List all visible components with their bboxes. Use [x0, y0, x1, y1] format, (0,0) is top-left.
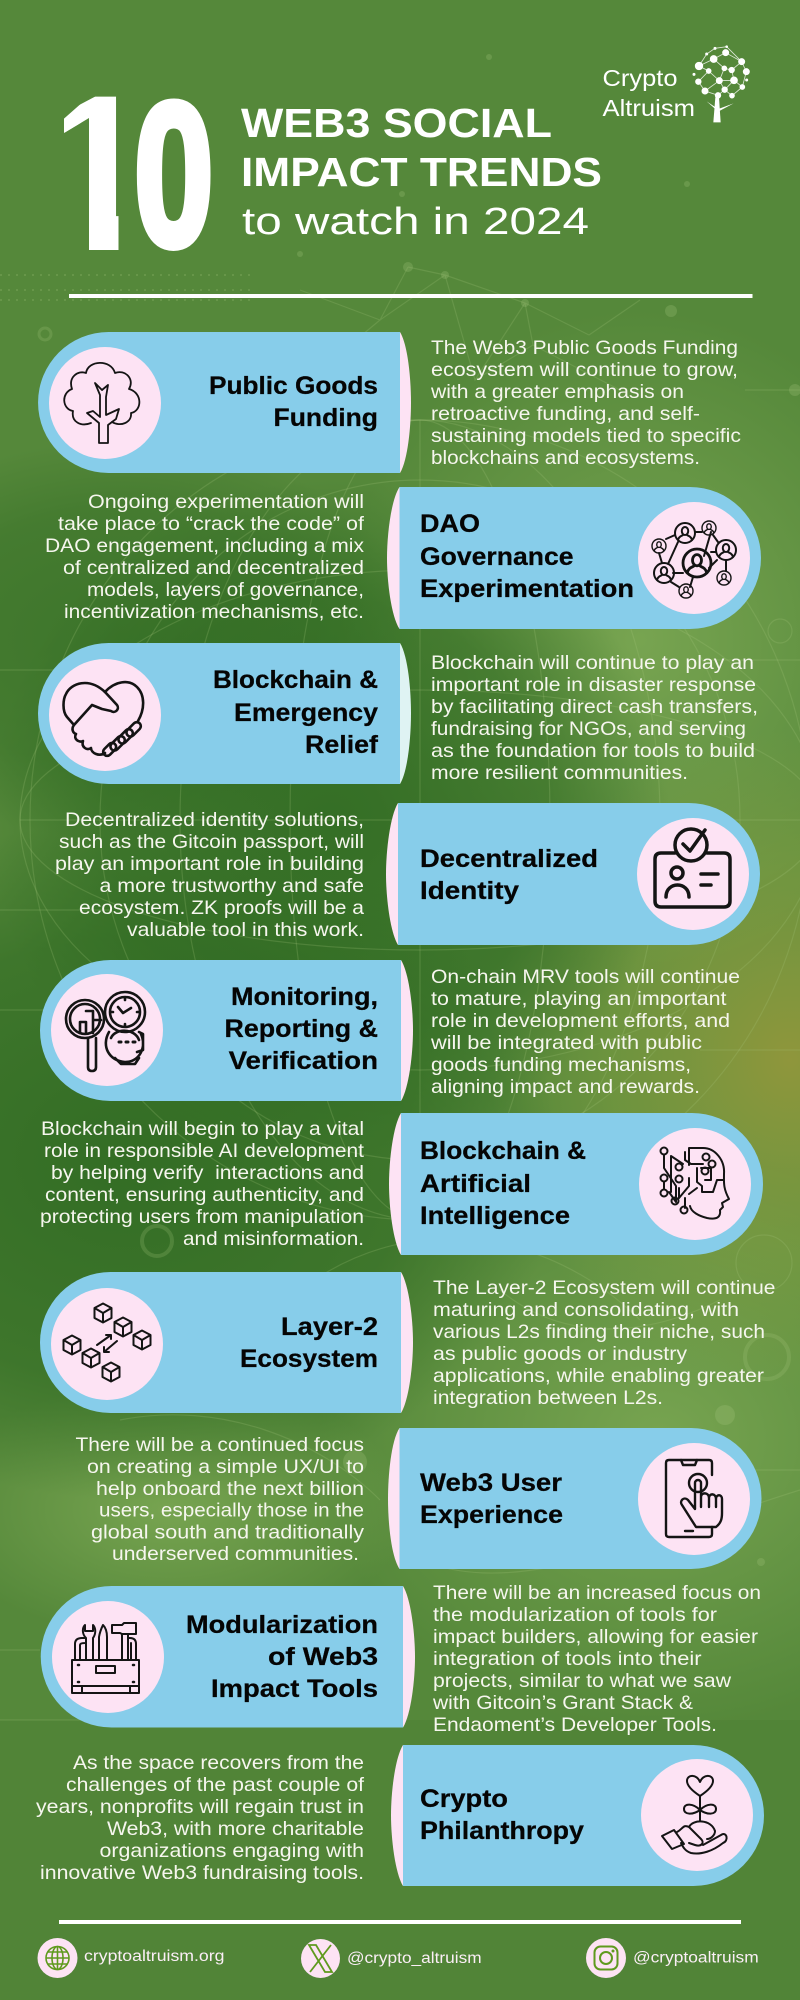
description: sustaining models tied to specific	[431, 425, 741, 447]
description	[432, 1582, 761, 1736]
heading	[213, 666, 379, 759]
bottom divider	[59, 1920, 741, 1924]
panel: Public Goods Funding	[38, 332, 741, 473]
description: underserved communities.	[112, 1543, 359, 1565]
icon: tree	[49, 347, 161, 459]
heading	[420, 845, 598, 905]
icon: heart handshake	[49, 659, 161, 771]
heading: Reporting &	[224, 1015, 378, 1043]
description	[40, 1118, 365, 1250]
description: Blockchain will continue to play an	[431, 652, 754, 674]
panel: Blockchain & Emergency Relief	[38, 643, 758, 784]
description: play an important role in building	[55, 853, 364, 875]
description: fundraising for NGOs, and serving	[431, 718, 746, 740]
description: Endaoment’s Developer Tools.	[433, 1714, 717, 1736]
description: important role in disaster response	[431, 674, 756, 696]
description: maturing and consolidating, with	[433, 1299, 739, 1321]
heading lines: IMPACT TRENDS	[241, 149, 602, 195]
heading	[186, 1611, 378, 1703]
description: blockchains and ecosystems.	[431, 447, 700, 469]
heading	[224, 983, 378, 1075]
logo: Crypto Altruism	[602, 46, 749, 122]
top divider	[69, 294, 752, 298]
pill	[389, 1113, 763, 1255]
description: by facilitating direct cash transfers,	[431, 696, 758, 718]
description: with a greater emphasis on	[430, 381, 684, 403]
X handle	[301, 1939, 482, 1978]
icon: magnifier, clock and gear	[51, 974, 163, 1086]
description: DAO engagement, including a mix	[45, 535, 364, 557]
description: will be integrated with public	[430, 1032, 702, 1054]
description: role in development efforts, and	[431, 1010, 730, 1032]
heading	[420, 1785, 584, 1845]
big number 10: 0	[134, 61, 214, 289]
heading	[420, 1137, 586, 1230]
heading: Ecosystem	[240, 1345, 378, 1373]
pill	[391, 1745, 764, 1886]
heading: Web3 User	[420, 1469, 562, 1497]
description: more resilient communities.	[431, 762, 688, 784]
panel: DAO Governance Experimentation	[45, 487, 761, 629]
panel: Layer-2 Ecosystem	[40, 1272, 775, 1413]
description: as public goods or industry	[433, 1343, 687, 1365]
description: integration between L2s.	[433, 1387, 663, 1409]
description: organizations engaging with	[100, 1840, 364, 1862]
logo: Crypto Altruism: Crypto	[602, 65, 678, 91]
description: As the space recovers from the	[73, 1752, 364, 1774]
pill	[41, 1586, 415, 1728]
heading lines	[241, 100, 602, 243]
description: content, ensuring authenticity, and	[45, 1184, 364, 1206]
description: There will be a continued focus	[76, 1434, 364, 1456]
pill	[38, 643, 411, 784]
heading: Artificial	[420, 1170, 531, 1198]
description: Web3, with more charitable	[107, 1818, 364, 1840]
heading lines: to watch in 2024	[242, 201, 589, 243]
description: users, especially those in the	[99, 1500, 364, 1522]
description	[55, 809, 364, 941]
big number 10	[64, 96, 210, 251]
description: goods funding mechanisms,	[431, 1054, 691, 1076]
heading: Funding	[274, 404, 378, 432]
website link: cryptoaltruism.org	[84, 1948, 224, 1965]
description: retroactive funding, and self-	[431, 403, 700, 425]
heading: Layer-2	[281, 1313, 378, 1341]
heading: Crypto	[420, 1785, 508, 1813]
logo: Crypto Altruism: Altruism	[602, 95, 695, 121]
description	[45, 491, 365, 623]
icon: identity card with check	[637, 818, 749, 930]
heading: Identity	[420, 877, 519, 905]
description: Blockchain will begin to play a vital	[41, 1118, 364, 1140]
description: various L2s finding their niche, such	[433, 1321, 765, 1343]
description: such as the Gitcoin passport, will	[59, 831, 364, 853]
description: integration of tools into their	[433, 1648, 702, 1670]
icon: hand holding heart plant	[641, 1759, 753, 1871]
heading: Monitoring,	[231, 983, 378, 1011]
pill	[40, 960, 413, 1101]
pill	[387, 487, 761, 629]
heading	[240, 1313, 378, 1373]
heading: Blockchain &	[420, 1137, 586, 1165]
description: the modularization of tools for	[433, 1604, 718, 1626]
heading: Experimentation	[420, 575, 634, 603]
heading: Philanthropy	[420, 1817, 584, 1845]
description	[431, 652, 758, 784]
icon: AI head with circuit	[639, 1128, 751, 1240]
description: incentivization mechanisms, etc.	[64, 601, 364, 623]
heading	[420, 510, 634, 603]
description: role in responsible AI development	[44, 1140, 365, 1162]
panel: Monitoring, Reporting & Verification	[40, 960, 740, 1101]
description: and misinformation.	[183, 1228, 364, 1250]
Instagram handle: @cryptoaltruism	[633, 1950, 759, 1966]
heading: Modularization	[186, 1611, 378, 1639]
heading lines: WEB3 SOCIAL	[241, 100, 552, 146]
description: The Web3 Public Goods Funding	[431, 337, 738, 359]
footer	[38, 1938, 759, 1978]
description: There will be an increased focus on	[433, 1582, 761, 1604]
heading: Impact Tools	[211, 1675, 378, 1703]
description: with Gitcoin’s Grant Stack &	[432, 1692, 693, 1714]
panel: Web3 User Experience	[76, 1428, 762, 1569]
description: models, layers of governance,	[87, 579, 364, 601]
description: help onboard the next billion	[96, 1478, 364, 1500]
title block	[64, 96, 600, 251]
big number 10: 1	[55, 61, 138, 289]
description: applications, while enabling greater	[433, 1365, 765, 1387]
heading	[209, 372, 378, 432]
Instagram handle	[586, 1938, 759, 1978]
icon: people network	[638, 502, 750, 614]
description: a more trustworthy and safe	[100, 875, 364, 897]
heading: Emergency	[234, 699, 378, 727]
pill	[38, 332, 411, 473]
heading: Intelligence	[420, 1202, 570, 1230]
description: On-chain MRV tools will continue	[431, 966, 740, 988]
description: ecosystem. ZK proofs will be a	[79, 897, 364, 919]
description	[433, 1277, 776, 1409]
description: The Layer-2 Ecosystem will continue	[433, 1277, 776, 1299]
description: on creating a simple UX/UI to	[87, 1456, 364, 1478]
description	[76, 1434, 364, 1565]
description: as the foundation for tools to build	[431, 740, 755, 762]
description: by helping verify interactions and	[51, 1162, 364, 1184]
heading: Decentralized	[420, 845, 598, 873]
website link	[38, 1938, 224, 1978]
description	[430, 337, 741, 469]
heading: Experience	[420, 1501, 563, 1529]
description: take place to “crack the code” of	[58, 513, 365, 535]
heading: Relief	[305, 731, 379, 759]
heading: Public Goods	[209, 372, 378, 400]
heading	[420, 1469, 563, 1529]
heading: DAO	[420, 510, 480, 538]
panel: Decentralized Identity	[55, 803, 760, 945]
description: challenges of the past couple of	[66, 1774, 365, 1796]
description: valuable tool in this work.	[127, 919, 364, 941]
X handle: @crypto_altruism	[347, 1950, 482, 1967]
panel: Blockchain & Artificial Intelligence	[40, 1113, 763, 1255]
icon: toolbox	[52, 1601, 164, 1713]
heading: Governance	[420, 543, 574, 571]
description: Decentralized identity solutions,	[65, 809, 364, 831]
description: aligning impact and rewards.	[431, 1076, 700, 1098]
description: of centralized and decentralized	[63, 557, 364, 579]
description	[36, 1752, 365, 1884]
icon: phone touch	[638, 1443, 750, 1555]
description: protecting users from manipulation	[40, 1206, 364, 1228]
pill	[386, 803, 760, 945]
pill	[40, 1272, 413, 1413]
description: impact builders, allowing for easier	[433, 1626, 759, 1648]
heading: of Web3	[268, 1643, 378, 1671]
description: global south and traditionally	[91, 1522, 364, 1544]
heading: Verification	[229, 1047, 378, 1075]
panel: Crypto Philanthropy	[36, 1745, 764, 1886]
panel: Modularization of Web3 Impact Tools	[41, 1582, 761, 1736]
description: ecosystem will continue to grow,	[431, 359, 738, 381]
description: projects, similar to what we saw	[433, 1670, 732, 1692]
pill	[388, 1428, 762, 1569]
description: to mature, playing an important	[431, 988, 727, 1010]
heading: Blockchain &	[213, 666, 378, 694]
icon: linked cubes	[51, 1288, 163, 1400]
description: innovative Web3 fundraising tools.	[40, 1862, 364, 1884]
description	[430, 966, 740, 1098]
description: Ongoing experimentation will	[88, 491, 364, 513]
description: years, nonprofits will regain trust in	[36, 1796, 364, 1818]
